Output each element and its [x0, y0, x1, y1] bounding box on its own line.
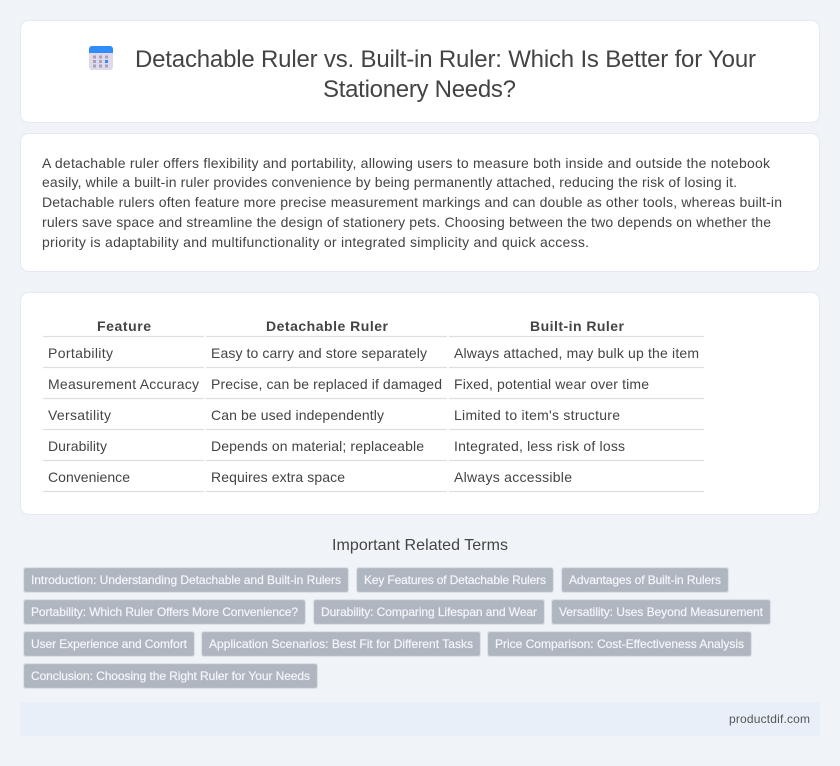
table row: portability: Portability — [48, 345, 113, 361]
text block: summary — [42, 155, 782, 250]
footer source label: productdif.com — [729, 712, 810, 726]
tag: advantages: Advantages of Built-in Rulers — [569, 573, 721, 587]
tag: versatility: Versatility: Uses Beyond Measurement — [559, 605, 764, 619]
tag: portability: Portability: Which Ruler Offers More Convenience? — [31, 605, 298, 619]
title — [135, 46, 756, 103]
table row: versatility: Can be used independently — [211, 407, 384, 423]
text block: summary: A detachable ruler offers flexibility and portability, allowing users to measure both inside and outside the notebook — [42, 155, 771, 171]
table row: versatility: Limited to item's structure — [454, 407, 620, 423]
panel: title header — [20, 20, 820, 122]
tag: advantages — [562, 568, 728, 592]
table header row: Built-in Ruler — [530, 318, 625, 334]
table row: measurement accuracy: Fixed, potential wear over time — [454, 376, 649, 392]
table row: portability — [48, 345, 699, 361]
heading: related terms: Important Related Terms — [332, 537, 508, 554]
table row: portability: Easy to carry and store separately — [211, 345, 427, 361]
table row: durability: Integrated, less risk of loss — [454, 438, 625, 454]
table row: portability: Always attached, may bulk up the item — [454, 345, 699, 361]
table row: convenience: Requires extra space — [211, 469, 345, 485]
text block: summary: priority is adaptability and multifunctionality or integrated simplicity and quick access. — [42, 234, 589, 250]
table row: versatility — [48, 407, 620, 423]
tag: portability — [24, 600, 306, 624]
panel: introduction paragraph — [20, 134, 820, 272]
tag: introduction: Introduction: Understanding Detachable and Built-in Rulers — [31, 573, 341, 587]
table row: measurement accuracy: Measurement Accuracy — [48, 376, 199, 392]
tag: application scenarios: Application Scenarios: Best Fit for Different Tasks — [209, 637, 473, 651]
footer — [20, 702, 820, 736]
table row: convenience: Convenience — [48, 469, 130, 485]
table row: durability: Durability — [48, 438, 107, 454]
icon: calendar — [89, 46, 113, 70]
table row: durability — [48, 438, 625, 454]
tag: durability — [314, 600, 544, 624]
text block: summary: Detachable rulers often feature more precise measurement markings and can double as other tools, whereas built-in — [42, 194, 782, 210]
tag: key features: Key Features of Detachable Rulers — [364, 573, 546, 587]
tag: user experience — [24, 632, 194, 656]
table row: versatility: Versatility — [48, 407, 111, 423]
title: Detachable Ruler vs. Built-in Ruler: Which Is Better for Your — [135, 46, 756, 73]
text block: summary: easily, while a built-in ruler provides convenience by being permanently attached, reducing the risk of losing it. — [42, 174, 737, 190]
tag: price comparison: Price Comparison: Cost-Effectiveness Analysis — [495, 637, 744, 651]
tag: application scenarios — [202, 632, 480, 656]
related term tags — [24, 568, 770, 688]
tag: introduction — [24, 568, 348, 592]
table row: durability: Depends on material; replaceable — [211, 438, 424, 454]
tag: versatility — [552, 600, 770, 624]
text block: summary: rulers save space and streamline the design of stationery pets. Choosing between the two depends on whether the — [42, 214, 771, 230]
tag: user experience: User Experience and Comfort — [31, 637, 188, 651]
title: Stationery Needs? — [323, 76, 516, 103]
table row: convenience: Always accessible — [454, 469, 572, 485]
table header row — [97, 318, 625, 334]
tag: durability: Durability: Comparing Lifespan and Wear — [321, 605, 537, 619]
tag: conclusion: Conclusion: Choosing the Right Ruler for Your Needs — [31, 669, 310, 683]
panel: comparison table — [20, 292, 820, 514]
table row: measurement accuracy: Precise, can be replaced if damaged — [211, 376, 442, 392]
table row: convenience — [48, 469, 572, 485]
table header row: Detachable Ruler — [266, 318, 389, 334]
tag: key features — [356, 568, 554, 592]
tag: conclusion — [24, 664, 318, 688]
table row: measurement accuracy — [48, 376, 649, 392]
tag: price comparison — [488, 632, 752, 656]
table header row: Feature — [97, 318, 151, 334]
